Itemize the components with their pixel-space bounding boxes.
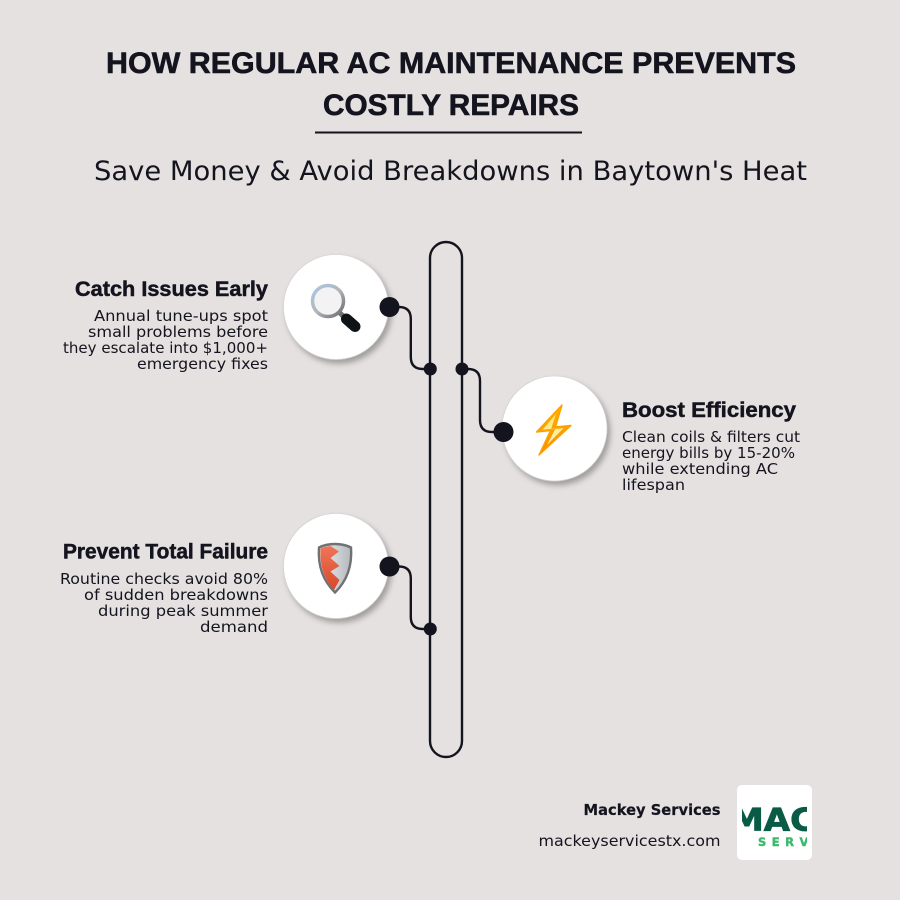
- logo: mackey services: MAC: [730, 802, 815, 838]
- icon circle: lightning bolt: [502, 376, 607, 481]
- subtitle: Save Money & Avoid Breakdowns in Baytown's Heat: [94, 156, 807, 187]
- infographic canvas: [62, 52, 812, 860]
- panel: boost efficiency: [456, 362, 800, 494]
- text: boost efficiency description: while extending AC: [622, 460, 778, 478]
- heading: boost efficiency: Boost Efficiency: [622, 399, 796, 422]
- title: COSTLY REPAIRS: [323, 89, 579, 122]
- text: boost efficiency description: Clean coils & filters cut: [622, 428, 800, 446]
- icon circle: magnifying glass: [284, 254, 388, 360]
- text: prevent total failure description: demand: [200, 618, 268, 636]
- text: prevent total failure description: of sudden breakdowns: [84, 586, 268, 604]
- title: [106, 47, 796, 122]
- panel: prevent total failure: [60, 514, 437, 636]
- connector: prevent total failure to rail: [380, 556, 437, 636]
- text: boost efficiency description: [622, 428, 800, 494]
- text: prevent total failure description: Routine checks avoid 80%: [60, 570, 268, 588]
- text: catch issues early description: emergency fixes: [137, 355, 268, 373]
- text: catch issues early description: they escalate into $1,000+: [63, 339, 268, 357]
- text: boost efficiency description: lifespan: [622, 476, 685, 494]
- text: catch issues early description: small problems before: [88, 323, 268, 341]
- text: catch issues early description: [63, 307, 268, 373]
- text: catch issues early description: Annual tune-ups spot: [94, 307, 268, 325]
- text: prevent total failure description: during peak summer: [98, 602, 269, 620]
- connector: catch issues early to rail: [380, 297, 437, 376]
- logo: mackey services: SERVICES: [758, 835, 865, 849]
- connector: boost efficiency to rail: [456, 362, 514, 442]
- footer: website: mackeyservicestx.com: [538, 832, 720, 850]
- text: prevent total failure description: [60, 570, 269, 636]
- heading: prevent total failure: Prevent Total Failure: [63, 540, 268, 564]
- text: boost efficiency description: energy bills by 15-20%: [622, 444, 795, 462]
- logo: mackey services: [737, 785, 812, 860]
- title: HOW REGULAR AC MAINTENANCE PREVENTS: [106, 47, 796, 80]
- heading: catch issues early: Catch Issues Early: [75, 278, 268, 301]
- central timeline rail: [430, 242, 462, 757]
- icon circle: shield: [284, 514, 388, 618]
- panel: catch issues early: [63, 254, 437, 376]
- footer: company name: Mackey Services: [584, 801, 720, 819]
